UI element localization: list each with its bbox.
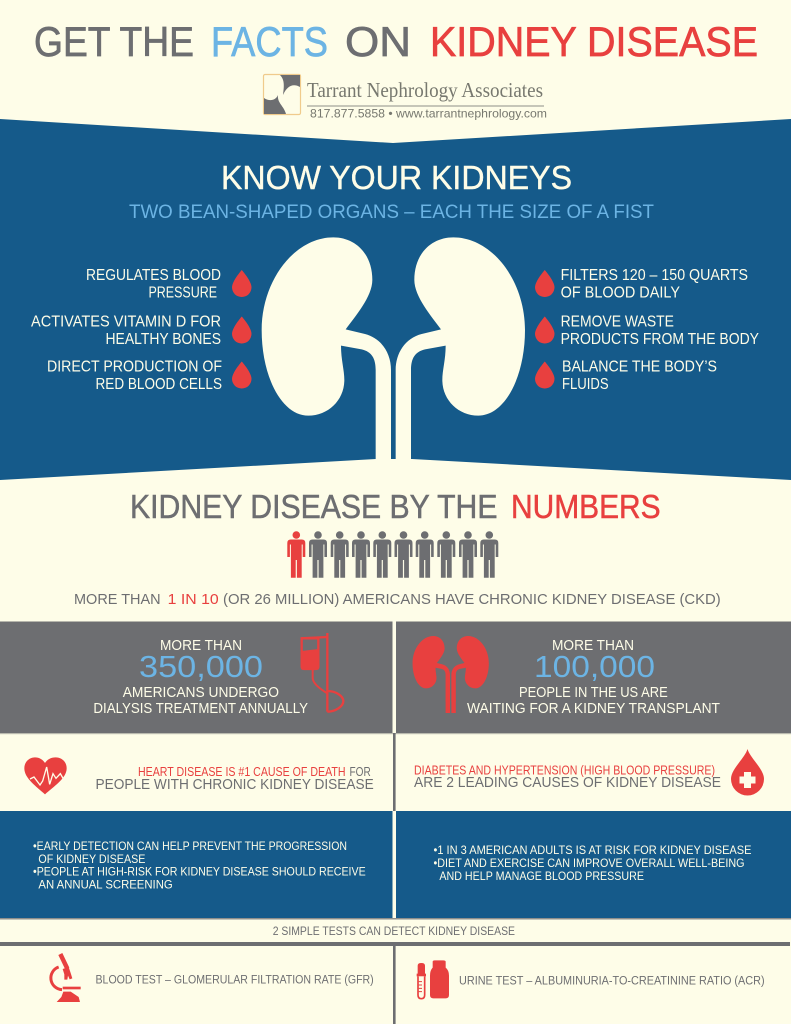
text: 2 simple tests heading: 2 SIMPLE TESTS CAN DETECT KIDNEY DISEASE — [273, 926, 515, 938]
left functions: ACTIVATES VITAMIN D FOR — [31, 314, 221, 331]
title: KIDNEY DISEASE — [430, 18, 758, 65]
text — [467, 637, 720, 717]
bullet list: •1 IN 3 AMERICAN ADULTS IS AT RISK FOR KIDNEY DISEASE — [434, 843, 752, 857]
heading: kidney disease by the numbers: NUMBERS — [511, 488, 661, 525]
title: GET THE — [34, 18, 194, 65]
bullet list: AN ANNUAL SCREENING — [38, 878, 173, 892]
statistic sentence: 1 in 10: (OR 26 MILLION) AMERICANS HAVE CHRONIC KIDNEY DISEASE (CKD) — [223, 591, 721, 608]
panel: know your kidneys — [0, 119, 791, 480]
text: DIABETES AND HYPERTENSION (HIGH BLOOD PRESSURE) — [414, 764, 715, 778]
text: MORE THAN — [552, 637, 634, 654]
icon: red kidneys — [413, 636, 489, 713]
heading: kidney disease by the numbers: KIDNEY DISEASE BY THE — [130, 488, 498, 525]
pictogram: 1 in 10 people — [287, 531, 498, 578]
left functions: HEALTHY BONES — [106, 331, 221, 348]
panel: heart disease fact — [24, 757, 374, 794]
kidneys illustration — [262, 237, 525, 461]
bullet list — [434, 843, 752, 883]
icon: dialysis bag — [302, 633, 343, 712]
logo contact: 817.877.5858 • www.tarrantnephrology.com — [310, 106, 547, 120]
icon: microscope — [51, 953, 81, 1002]
heading: KNOW YOUR KIDNEYS — [221, 159, 572, 196]
icon: blood drop with cross — [731, 749, 764, 796]
right functions: OF BLOOD DAILY — [561, 285, 680, 302]
text — [414, 764, 721, 791]
right functions: FLUIDS — [562, 376, 609, 393]
panel: dialysis statistic — [0, 622, 392, 733]
title — [34, 18, 758, 65]
left functions: REGULATES BLOOD — [86, 267, 221, 284]
bullet list: •EARLY DETECTION CAN HELP PREVENT THE PROGRESSION — [33, 839, 347, 853]
bullet list: AND HELP MANAGE BLOOD PRESSURE — [439, 869, 644, 883]
title: FACTS — [211, 18, 328, 65]
right functions: PRODUCTS FROM THE BODY — [561, 331, 759, 348]
bullet list — [33, 839, 366, 892]
bullet list: OF KIDNEY DISEASE — [38, 852, 145, 866]
text: 100,000 — [534, 649, 655, 684]
text: MORE THAN — [160, 637, 242, 654]
text: BLOOD TEST – GLOMERULAR FILTRATION RATE (GFR) — [96, 974, 374, 986]
panel: blood test — [51, 953, 374, 1002]
left functions: RED BLOOD CELLS — [96, 376, 222, 393]
text — [96, 765, 374, 793]
right functions: BALANCE THE BODY’S — [562, 359, 717, 376]
subheading: TWO BEAN-SHAPED ORGANS – EACH THE SIZE OF A FIST — [129, 201, 654, 223]
text: FOR — [350, 765, 371, 779]
panel: risk and prevention — [396, 811, 791, 918]
logo: Tarrant Nephrology Associates — [264, 74, 547, 120]
title: ON — [345, 18, 411, 65]
statistic sentence: 1 in 10: MORE THAN — [74, 591, 161, 608]
text: PEOPLE WITH CHRONIC KIDNEY DISEASE — [96, 776, 374, 793]
text: 350,000 — [139, 649, 263, 684]
left functions — [31, 267, 222, 393]
statistic sentence: 1 in 10: 1 IN 10 — [168, 591, 219, 608]
left functions: DIRECT PRODUCTION OF — [47, 359, 222, 376]
right functions: FILTERS 120 – 150 QUARTS — [561, 267, 748, 284]
bullet list: •DIET AND EXERCISE CAN IMPROVE OVERALL WELL-BEING — [434, 856, 744, 870]
text: ARE 2 LEADING CAUSES OF KIDNEY DISEASE — [414, 774, 721, 791]
right functions: REMOVE WASTE — [561, 314, 674, 331]
icon: dropper and bottle — [417, 960, 449, 999]
text — [93, 637, 308, 717]
text: DIALYSIS TREATMENT ANNUALLY — [93, 700, 308, 717]
text: URINE TEST – ALBUMINURIA-TO-CREATININE RATIO (ACR) — [459, 975, 765, 987]
logo name: Tarrant Nephrology Associates — [307, 78, 543, 102]
text: HEART DISEASE IS #1 CAUSE OF DEATH — [138, 765, 346, 779]
right functions — [561, 267, 759, 393]
icon: logo mark — [264, 74, 300, 114]
panel: diabetes and hypertension fact — [414, 749, 764, 796]
icon: heart with pulse — [24, 757, 67, 794]
icons: blood drops — [232, 270, 554, 389]
panel: urine test — [417, 960, 765, 999]
panel: early detection — [0, 811, 392, 918]
left functions: PRESSURE — [148, 285, 217, 302]
panel: transplant statistic — [396, 622, 791, 733]
text: PEOPLE IN THE US ARE — [519, 684, 668, 701]
text: WAITING FOR A KIDNEY TRANSPLANT — [467, 700, 720, 717]
bullet list: •PEOPLE AT HIGH-RISK FOR KIDNEY DISEASE SHOULD RECEIVE — [33, 865, 366, 879]
text: AMERICANS UNDERGO — [123, 684, 279, 701]
